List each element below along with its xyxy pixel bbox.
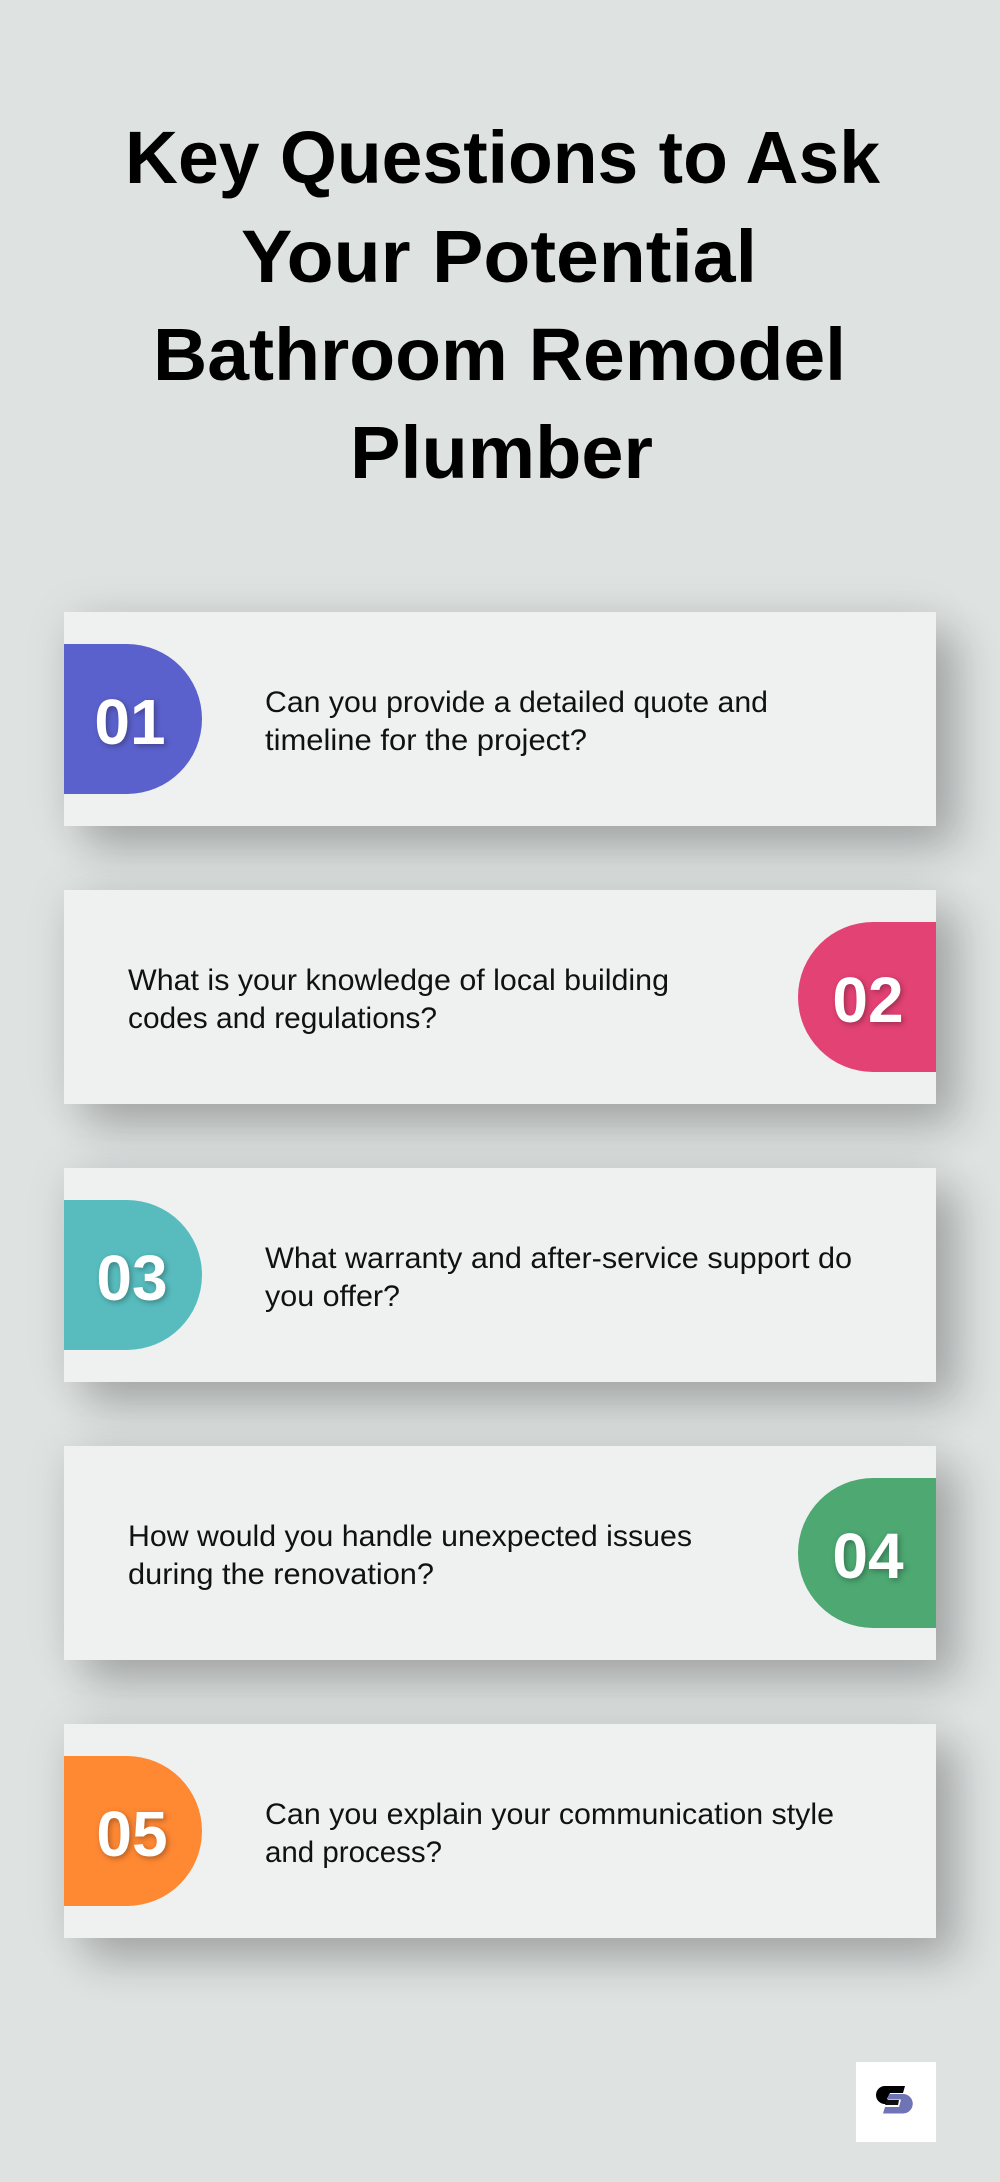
question text 02: codes and regulations? [128,1002,437,1035]
question text 03 [265,1242,852,1313]
logo mark black [876,2086,905,2104]
title: Bathroom Remodel [153,313,846,396]
question text 05 [265,1798,834,1869]
question text 01 [265,686,768,757]
number 01: 01 [94,686,166,758]
question text 05: and process? [265,1836,442,1869]
question text 05: Can you explain your communication style [265,1798,834,1831]
title: Your Potential [241,215,757,298]
panel: question 01 [64,612,958,848]
question text 03: you offer? [265,1280,400,1313]
badge 04 [798,1478,936,1628]
panel: question 02 [64,890,958,1126]
badge 02 [798,922,936,1072]
badge 03 [64,1200,202,1350]
badge 05 [64,1756,202,1906]
question text 04: during the renovation? [128,1558,434,1591]
number 04: 04 [832,1520,904,1592]
logo mark blue [883,2094,913,2114]
panel: question 04 [64,1446,958,1682]
question text 03: What warranty and after-service support do [265,1242,852,1275]
badge 01 [64,644,202,794]
number 02: 02 [832,964,904,1036]
question text 02 [128,964,669,1035]
number 03: 03 [96,1242,168,1314]
number 05: 05 [96,1798,168,1870]
title: Plumber [350,411,653,494]
question text 04 [128,1520,692,1591]
panel: question 03 [64,1168,958,1404]
question text 02: What is your knowledge of local building [128,964,669,997]
title [125,116,881,494]
question text 01: timeline for the project? [265,724,587,757]
question text 01: Can you provide a detailed quote and [265,686,768,719]
panel: question 05 [64,1724,958,1960]
logo [856,2062,936,2142]
question text 04: How would you handle unexpected issues [128,1520,692,1553]
title: Key Questions to Ask [125,116,881,199]
